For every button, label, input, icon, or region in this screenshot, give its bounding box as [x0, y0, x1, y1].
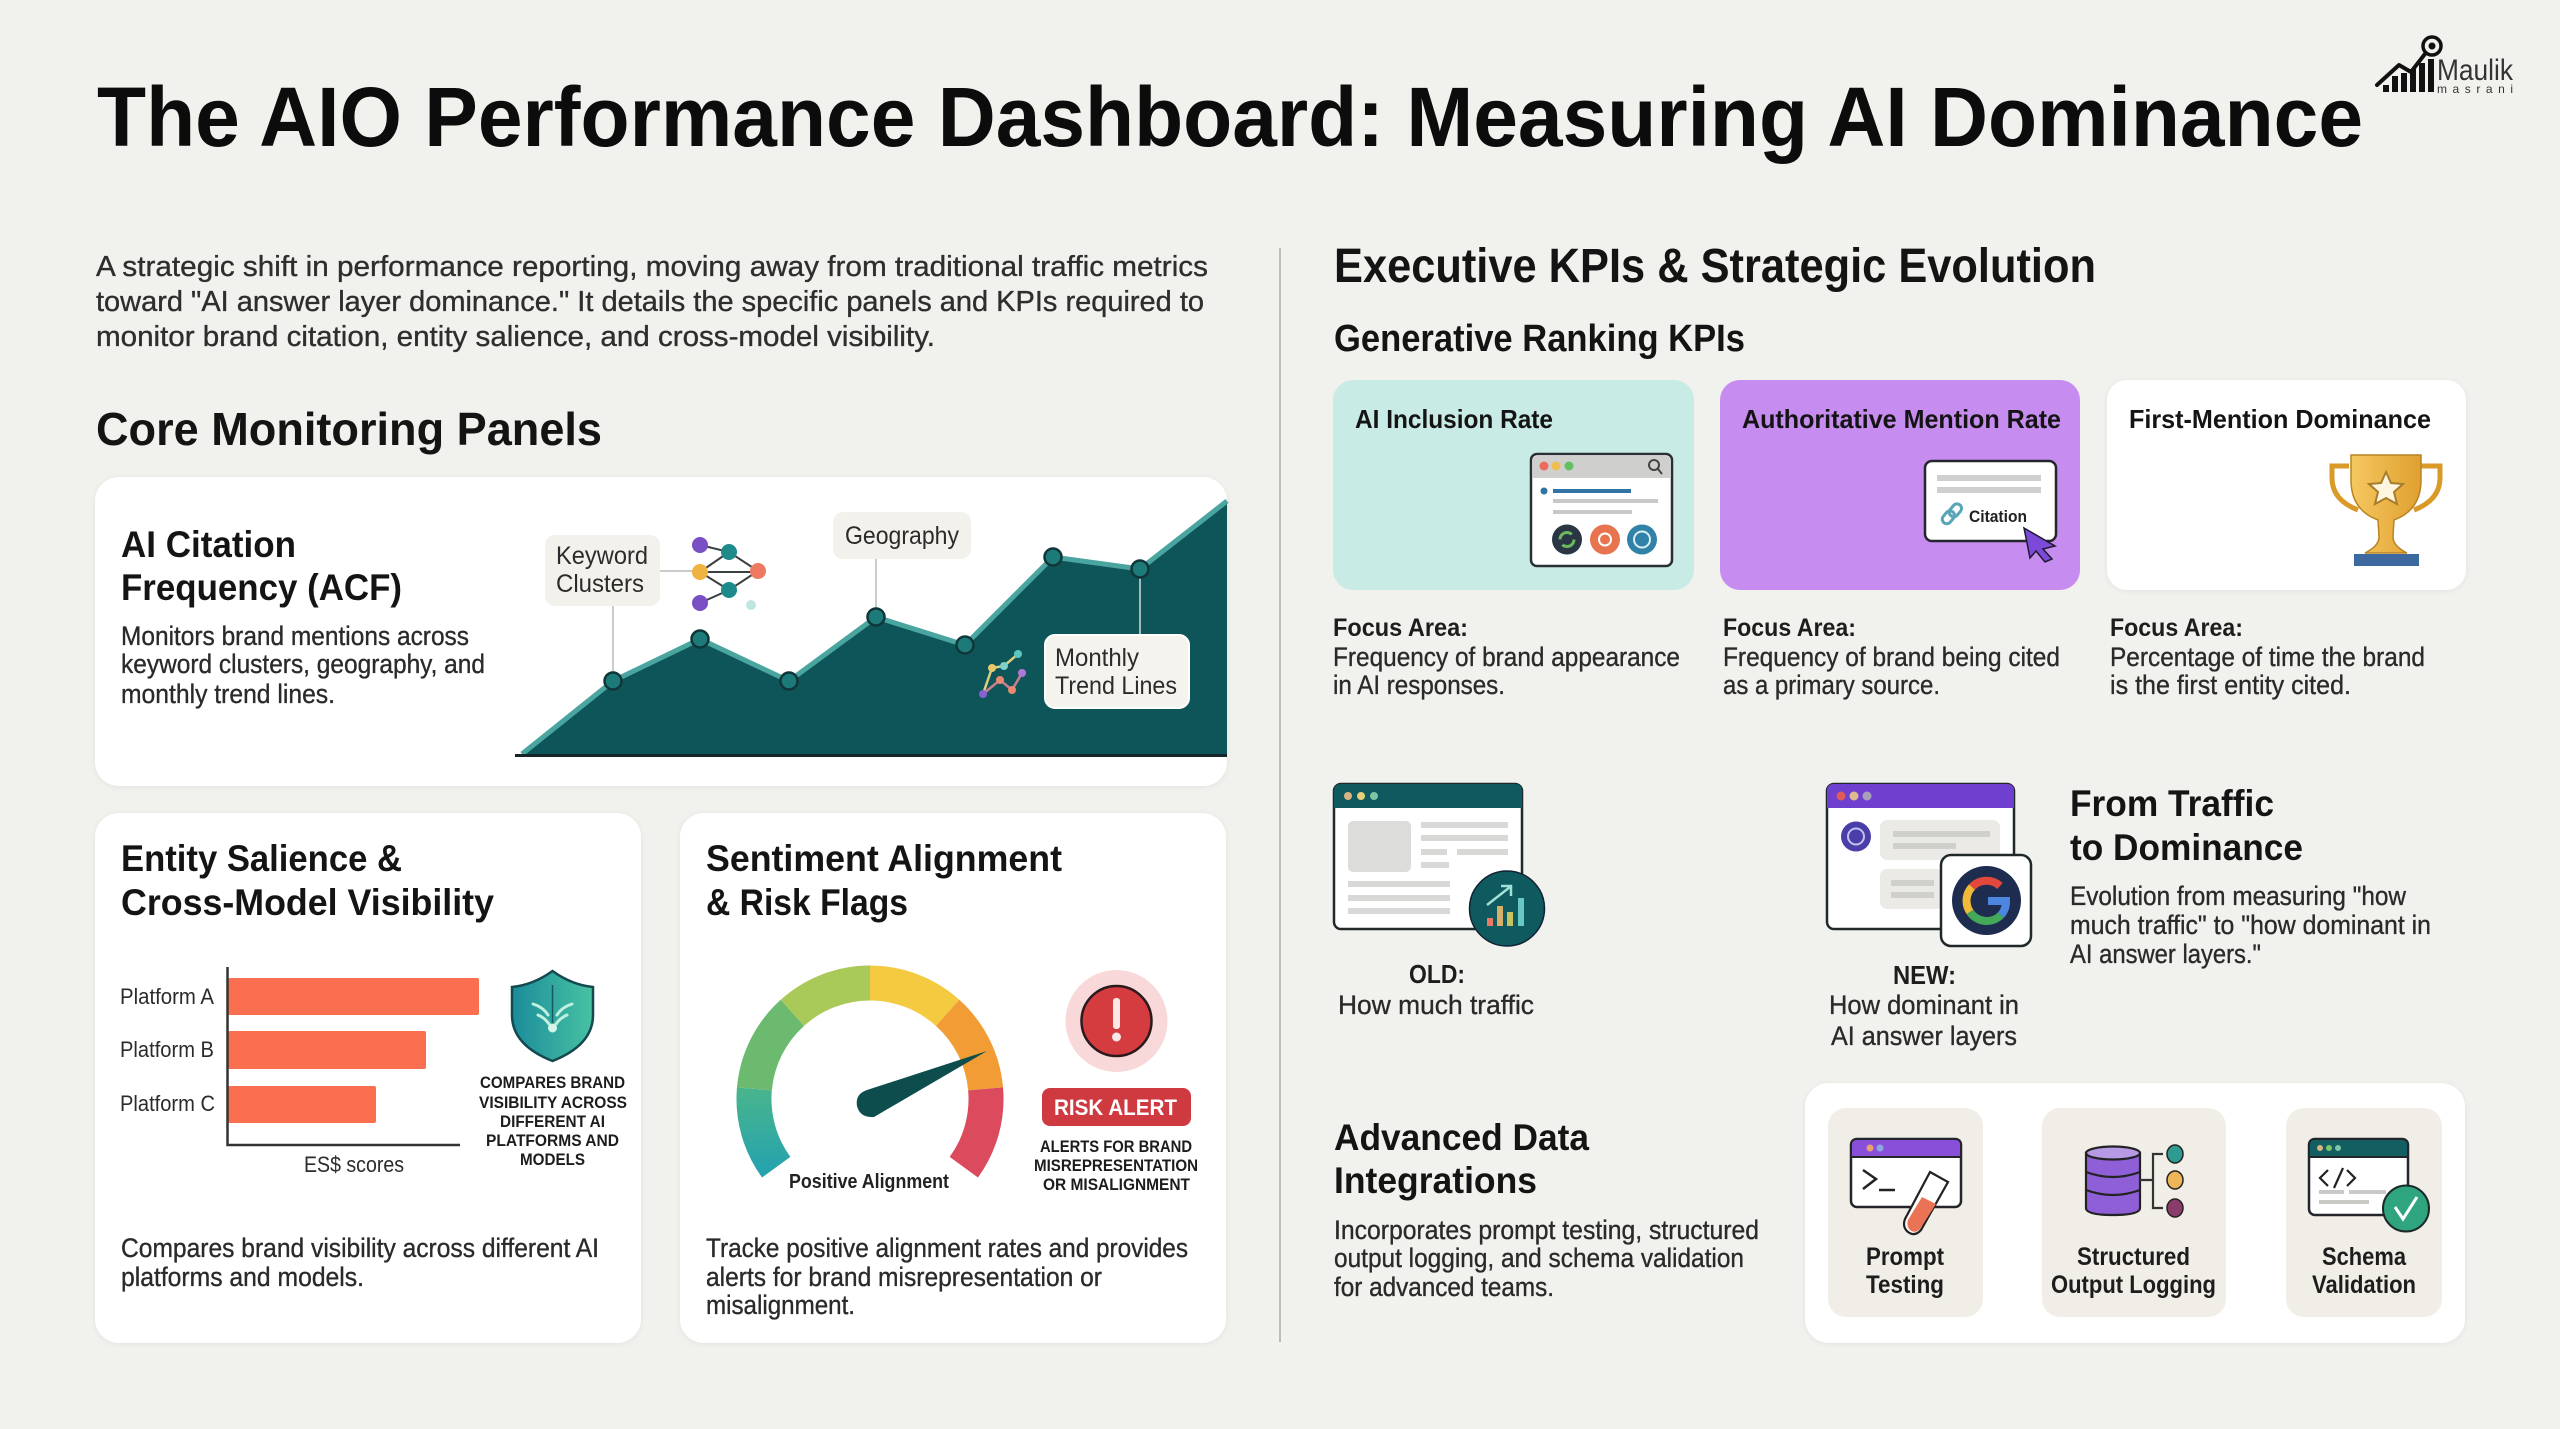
panel heading: sentiment: & Risk Flags	[706, 882, 908, 923]
card: authoritative mention rate	[1720, 380, 2080, 590]
callout: compares brand visibility	[479, 1073, 627, 1169]
bar chart: platform ES scores: Platform A	[120, 984, 214, 1009]
title: The AIO Performance Dashboard: Measuring AI Dominance	[97, 70, 2363, 164]
card: authoritative mention rate: Authoritative Mention Rate	[1742, 404, 2061, 434]
callout: compares brand visibility: PLATFORMS AND	[486, 1131, 619, 1150]
panel heading: ACF	[121, 524, 402, 608]
tile: prompt testing: Prompt	[1866, 1243, 1945, 1271]
label: keyword clusters: Keyword	[556, 542, 648, 570]
caption: old: How much traffic	[1338, 990, 1534, 1020]
badge: risk alert: RISK ALERT	[1054, 1095, 1178, 1120]
tile: structured output logging: Output Logging	[2051, 1271, 2216, 1299]
panel heading: entity salience: Entity Salience &	[121, 838, 402, 879]
panel: entity salience and cross-model visibility	[95, 813, 641, 1343]
caption: new: AI answer layers	[1831, 1021, 2017, 1051]
panel description: sentiment: misalignment.	[706, 1290, 855, 1320]
description: advanced data integrations	[1334, 1215, 1759, 1302]
description: advanced data integrations: for advanced teams.	[1334, 1272, 1554, 1302]
icon: trophy	[2332, 455, 2440, 566]
bar chart: platform ES scores: Platform B	[120, 1037, 214, 1062]
gauge: positive alignment	[754, 983, 987, 1193]
callout: compares brand visibility: MODELS	[520, 1150, 585, 1169]
bar chart: platform ES scores: ES$ scores	[304, 1152, 404, 1177]
panel description: sentiment: Tracke positive alignment rates and provides	[706, 1233, 1188, 1263]
heading: advanced data integrations: Advanced Data	[1334, 1117, 1589, 1158]
label: monthly trend lines	[1045, 635, 1189, 708]
bar chart: platform ES scores	[120, 967, 479, 1177]
caption: new: NEW:	[1893, 960, 1956, 990]
label: keyword clusters	[545, 535, 660, 606]
icon: terminal and test tube	[1851, 1139, 1961, 1234]
card: AI inclusion rate: AI Inclusion Rate	[1355, 404, 1553, 434]
panel description: ACF: monthly trend lines.	[121, 679, 335, 709]
focus area: AI inclusion rate: in AI responses.	[1333, 670, 1505, 700]
description: advanced data integrations: output logging, and schema validation	[1334, 1243, 1744, 1273]
icon: shield	[512, 971, 593, 1061]
icon: old traffic dashboard	[1334, 784, 1544, 946]
description: evolution: AI answer layers."	[2070, 939, 2261, 969]
icon: new AI answer layer	[1827, 784, 2031, 946]
focus area: authoritative mention rate	[1723, 614, 2060, 700]
caption: new	[1829, 960, 2019, 1051]
focus area: first-mention dominance	[2110, 614, 2425, 700]
label: keyword clusters: Clusters	[556, 570, 644, 598]
logo: Maulik Masrani: masrani	[2437, 82, 2513, 96]
card: AI inclusion rate	[1333, 380, 1694, 590]
heading: advanced data integrations	[1334, 1117, 1589, 1201]
tile: prompt testing: Testing	[1866, 1271, 1944, 1299]
icon: mini trend lines	[979, 650, 1026, 698]
callout: compares brand visibility: COMPARES BRAND	[480, 1073, 625, 1092]
panel description: ACF: keyword clusters, geography, and	[121, 649, 485, 679]
panel description: entity salience: platforms and models.	[121, 1262, 364, 1292]
panel: AI citation frequency	[95, 477, 1227, 786]
focus area: AI inclusion rate: Frequency of brand appearance	[1333, 642, 1680, 672]
intro text: monitor brand citation, entity salience, and cross-model visibility.	[96, 321, 935, 353]
callout: alerts for brand misrepresentation: ALERTS FOR BRAND	[1040, 1137, 1192, 1156]
panel heading: ACF: Frequency (ACF)	[121, 567, 402, 608]
focus area: AI inclusion rate	[1333, 614, 1680, 700]
badge: risk alert	[1042, 1088, 1191, 1126]
panel: integrations	[1805, 1083, 2465, 1343]
heading: from traffic to dominance: to Dominance	[2070, 827, 2303, 868]
tile: prompt testing	[1828, 1108, 1983, 1317]
description: advanced data integrations: Incorporates prompt testing, structured	[1334, 1215, 1759, 1245]
tile: schema validation: Schema	[2322, 1243, 2407, 1271]
label: geography: Geography	[845, 522, 959, 550]
description: evolution: Evolution from measuring "how	[2070, 881, 2406, 911]
icon: browser with AI engines	[1531, 454, 1672, 566]
icon: database with branches	[2086, 1145, 2183, 1217]
caption: old: OLD:	[1409, 959, 1465, 989]
logo: Maulik Masrani	[2377, 37, 2514, 96]
panel description: entity salience: Compares brand visibility across different AI	[121, 1233, 599, 1263]
panel heading: ACF: AI Citation	[121, 524, 296, 565]
area chart: monthly citation trend	[515, 501, 1227, 756]
logo: Maulik Masrani: Maulik	[2437, 54, 2514, 87]
panel description: sentiment: alerts for brand misrepresentation or	[706, 1262, 1102, 1292]
panel description: ACF	[121, 621, 485, 709]
panel heading: entity salience: Cross-Model Visibility	[121, 882, 494, 923]
focus area: first-mention dominance: Percentage of time the brand	[2110, 642, 2425, 672]
intro text: toward "AI answer layer dominance." It details the specific panels and KPIs required to	[96, 286, 1204, 318]
tile: schema validation: Validation	[2312, 1271, 2416, 1299]
focus area: authoritative mention rate: Frequency of brand being cited	[1723, 642, 2060, 672]
intro text: A strategic shift in performance reporting, moving away from traditional traffic metrics	[96, 251, 1208, 283]
card: first-mention dominance	[2107, 380, 2466, 590]
callout: alerts for brand misrepresentation: MISREPRESENTATION	[1034, 1156, 1198, 1175]
focus area: first-mention dominance: Focus Area:	[2110, 614, 2243, 642]
icon: risk alert warning	[1066, 970, 1168, 1072]
heading: from traffic to dominance: From Traffic	[2070, 783, 2274, 824]
subheading: generative ranking KPIs: Generative Ranking KPIs	[1334, 318, 1745, 360]
caption: new: How dominant in	[1829, 990, 2019, 1020]
panel description: entity salience	[121, 1233, 599, 1292]
label: monthly trend lines: Trend Lines	[1055, 672, 1177, 700]
focus area: first-mention dominance: is the first entity cited.	[2110, 670, 2351, 700]
label: geography	[833, 512, 971, 559]
tile: structured output logging	[2042, 1108, 2226, 1317]
tile: structured output logging: Structured	[2077, 1243, 2190, 1271]
icon: citation card with cursor	[1925, 461, 2056, 562]
description: evolution: much traffic" to "how dominant in	[2070, 910, 2431, 940]
gauge: positive alignment: Positive Alignment	[789, 1171, 949, 1193]
label: monthly trend lines: Monthly	[1055, 644, 1139, 672]
caption: old	[1338, 959, 1534, 1020]
icon: code window with check	[2309, 1139, 2429, 1232]
focus area: authoritative mention rate: Focus Area:	[1723, 614, 1856, 642]
focus area: AI inclusion rate: Focus Area:	[1333, 614, 1468, 642]
panel: sentiment alignment and risk flags	[680, 813, 1226, 1343]
callout: alerts for brand misrepresentation: OR MISALIGNMENT	[1043, 1175, 1191, 1194]
tile: schema validation	[2286, 1108, 2442, 1317]
panel heading: sentiment	[706, 838, 1062, 923]
panel heading: sentiment: Sentiment Alignment	[706, 838, 1062, 879]
panel description: ACF: Monitors brand mentions across	[121, 621, 469, 651]
heading: from traffic to dominance	[2070, 783, 2303, 868]
bar chart: platform ES scores: Platform C	[120, 1091, 215, 1116]
heading: advanced data integrations: Integrations	[1334, 1160, 1537, 1201]
card: first-mention dominance: First-Mention Dominance	[2129, 404, 2431, 434]
callout: compares brand visibility: DIFFERENT AI	[500, 1112, 605, 1131]
icon: cluster network	[660, 537, 766, 611]
focus area: authoritative mention rate: as a primary source.	[1723, 670, 1940, 700]
heading: executive KPIs and strategic evolution: Executive KPIs & Strategic Evolution	[1334, 240, 2096, 293]
icon: citation card with cursor: Citation	[1969, 507, 2027, 526]
panel heading: entity salience	[121, 838, 494, 923]
callout: alerts for brand misrepresentation	[1034, 1137, 1198, 1194]
intro text	[96, 251, 1208, 353]
description: evolution	[2070, 881, 2431, 969]
heading: core monitoring panels: Core Monitoring Panels	[96, 403, 602, 455]
callout: compares brand visibility: VISIBILITY ACROSS	[479, 1093, 627, 1112]
panel description: sentiment	[706, 1233, 1188, 1320]
